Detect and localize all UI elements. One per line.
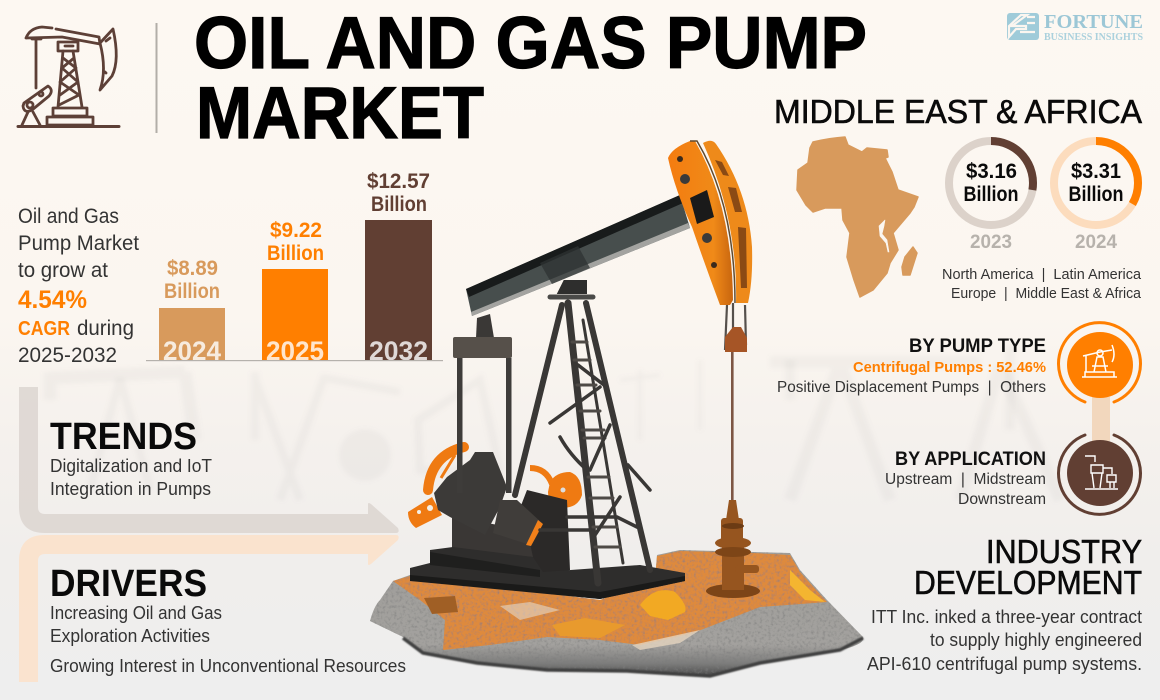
bar 2032: Billion bbox=[371, 193, 427, 216]
text block: drivers: Exploration Activities bbox=[50, 626, 210, 646]
arrow: drivers bbox=[19, 535, 399, 682]
icon: pump jack outline bbox=[18, 27, 119, 126]
text block: regions: Europe | Middle East & Africa bbox=[951, 285, 1142, 302]
text block: trends: Integration in Pumps bbox=[50, 479, 211, 499]
text block: industry development: API-610 centrifugal pump systems. bbox=[867, 654, 1142, 674]
bar 2032: $12.57 bbox=[367, 170, 430, 193]
text block: drivers: DRIVERS bbox=[50, 563, 207, 605]
title: OIL AND GAS PUMP bbox=[194, 3, 867, 84]
bar 2024 bbox=[159, 257, 225, 366]
donut: 2024: 2024 bbox=[1075, 232, 1117, 253]
donut: 2023: $3.16 bbox=[966, 160, 1017, 183]
text block: by pump type: Positive Displacement Pumps | Others bbox=[777, 379, 1046, 396]
text block: industry development: INDUSTRY bbox=[986, 533, 1142, 570]
arrow: trends bbox=[19, 387, 399, 533]
bar 2024: $8.89 bbox=[167, 257, 218, 280]
samson post tower bbox=[515, 282, 650, 583]
segmentation connector bbox=[1092, 397, 1110, 441]
bar 2025: $9.22 bbox=[270, 219, 322, 242]
text block: market growth: CAGR bbox=[18, 318, 70, 340]
bar 2024: Billion bbox=[164, 280, 220, 303]
divider bbox=[156, 23, 158, 133]
icon: pump type circle bbox=[1058, 323, 1140, 402]
rock base bbox=[370, 550, 863, 676]
bar 2024: 2024 bbox=[163, 336, 221, 366]
donut: 2024 bbox=[1054, 141, 1138, 253]
text block: industry development: ITT Inc. inked a three-year contract bbox=[871, 607, 1142, 627]
text block: market growth: 2025-2032 bbox=[18, 344, 117, 367]
wellhead bbox=[706, 500, 760, 598]
text block: market growth: Pump Market bbox=[18, 232, 139, 255]
donut: 2024: $3.31 bbox=[1071, 160, 1121, 183]
title: MARKET bbox=[196, 73, 484, 154]
text block: industry development: DEVELOPMENT bbox=[914, 564, 1142, 601]
text block: by application: BY APPLICATION bbox=[895, 449, 1046, 470]
logo: Fortune Business Insights: BUSINESS INSIGHTS bbox=[1044, 32, 1143, 43]
text block: trends: TRENDS bbox=[50, 416, 197, 458]
bar 2032 bbox=[365, 170, 432, 366]
text block: by application: Downstream bbox=[958, 491, 1046, 508]
text block: by pump type: Centrifugal Pumps : 52.46% bbox=[853, 359, 1046, 376]
text block: market growth: Oil and Gas bbox=[18, 205, 119, 228]
text block: trends bbox=[50, 416, 212, 499]
bar 2025 bbox=[262, 219, 328, 366]
bar chart: market size bbox=[146, 170, 443, 366]
map: Africa bbox=[797, 137, 918, 297]
text block: market growth: during bbox=[77, 317, 134, 340]
text block: by pump type: BY PUMP TYPE bbox=[909, 336, 1046, 357]
text block: by application: Upstream | Midstream bbox=[885, 471, 1046, 488]
pump jack illustration bbox=[370, 141, 863, 676]
icon: application circle bbox=[1058, 435, 1140, 514]
bridle cables and polished rod bbox=[725, 303, 747, 502]
bar 2025: 2025 bbox=[266, 336, 324, 366]
text block: by application bbox=[885, 449, 1046, 508]
bar 2032: 2032 bbox=[369, 336, 428, 366]
donut: 2023: Billion bbox=[964, 183, 1018, 206]
text block: regions: North America | Latin America bbox=[942, 266, 1142, 283]
donut: 2023 bbox=[949, 141, 1033, 253]
text block: market growth: 4.54% bbox=[18, 286, 87, 314]
background: ghost oil field silhouettes bbox=[50, 345, 1060, 500]
text block: market growth bbox=[18, 205, 139, 367]
walking beam bbox=[466, 195, 690, 316]
text block: market growth: to grow at bbox=[18, 259, 108, 282]
text block: drivers bbox=[50, 563, 406, 676]
heading: region: MIDDLE EAST & AFRICA bbox=[774, 94, 1143, 131]
donut: 2023: 2023 bbox=[970, 232, 1012, 253]
gearbox and base plates bbox=[410, 452, 685, 599]
logo: Fortune Business Insights bbox=[1007, 11, 1143, 43]
bar 2025: Billion bbox=[267, 242, 324, 265]
title bbox=[194, 3, 867, 154]
horse head bbox=[668, 141, 752, 305]
text block: industry development bbox=[867, 533, 1142, 674]
text block: regions bbox=[942, 266, 1142, 302]
donut: 2024: Billion bbox=[1068, 183, 1124, 206]
logo: Fortune Business Insights: FORTUNE bbox=[1044, 11, 1143, 33]
text block: drivers: Growing Interest in Unconventional Resources bbox=[50, 656, 406, 676]
text block: trends: Digitalization and IoT bbox=[50, 456, 212, 476]
text block: drivers: Increasing Oil and Gas bbox=[50, 603, 222, 623]
crank arm left bbox=[408, 447, 582, 528]
equalizer and pitman arms bbox=[453, 314, 512, 493]
text block: by pump type bbox=[777, 336, 1046, 396]
text block: industry development: to supply highly engineered bbox=[930, 630, 1142, 650]
